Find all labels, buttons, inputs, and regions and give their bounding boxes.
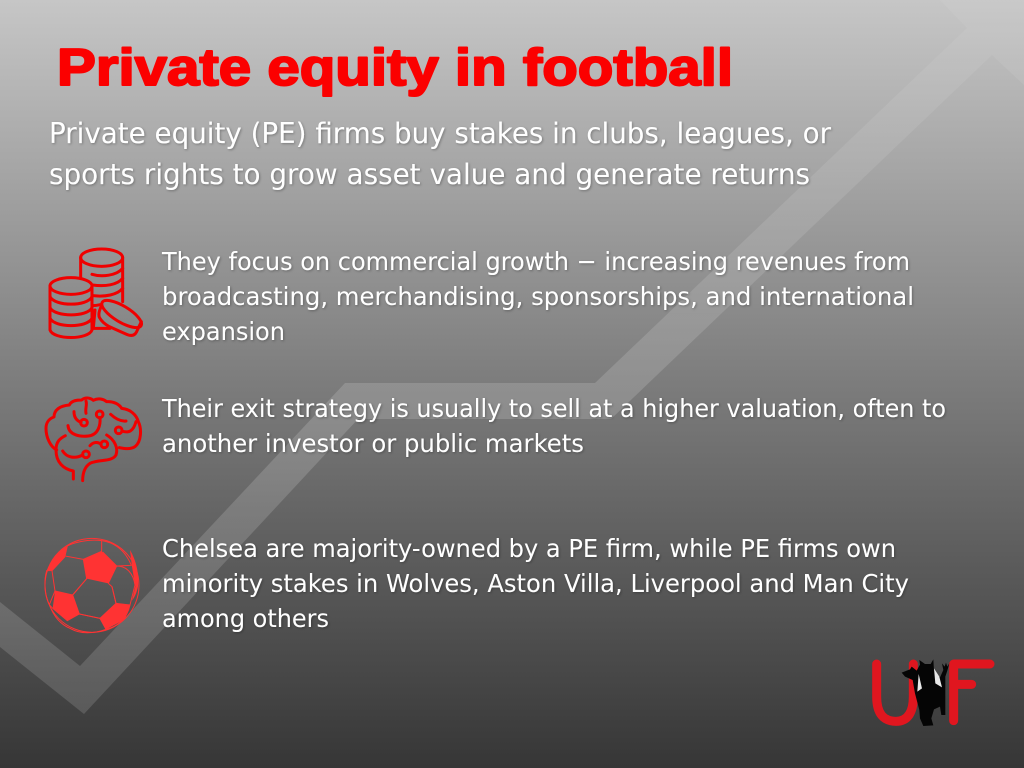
title: Private equity in football bbox=[57, 39, 733, 97]
icon: brain bbox=[46, 398, 141, 481]
logo bbox=[877, 659, 990, 726]
text: exit strategy: Their exit strategy is usually to sell at a higher valuation, often to bbox=[161, 394, 946, 423]
text: ownership examples: minority stakes in Wolves, Aston Villa, Liverpool and Man City bbox=[162, 569, 909, 598]
text: exit strategy bbox=[161, 394, 946, 458]
text: ownership examples bbox=[162, 534, 909, 633]
text: commercial growth: broadcasting, merchandising, sponsorships, and international bbox=[162, 282, 914, 311]
text: commercial growth: expansion bbox=[162, 317, 285, 346]
icon: coins bbox=[50, 249, 145, 337]
text: ownership examples: among others bbox=[162, 604, 329, 633]
intro text: Private equity (PE) firms buy stakes in clubs, leagues, or bbox=[49, 117, 831, 150]
text: ownership examples: Chelsea are majority-owned by a PE firm, while PE firms own bbox=[162, 534, 896, 563]
text: exit strategy: another investor or public markets bbox=[162, 429, 584, 458]
intro text: sports rights to grow asset value and generate returns bbox=[49, 158, 810, 191]
text: commercial growth bbox=[161, 247, 914, 346]
text: commercial growth: They focus on commercial growth − increasing revenues from bbox=[161, 247, 910, 276]
intro text bbox=[49, 117, 831, 191]
icon: football bbox=[45, 538, 139, 633]
